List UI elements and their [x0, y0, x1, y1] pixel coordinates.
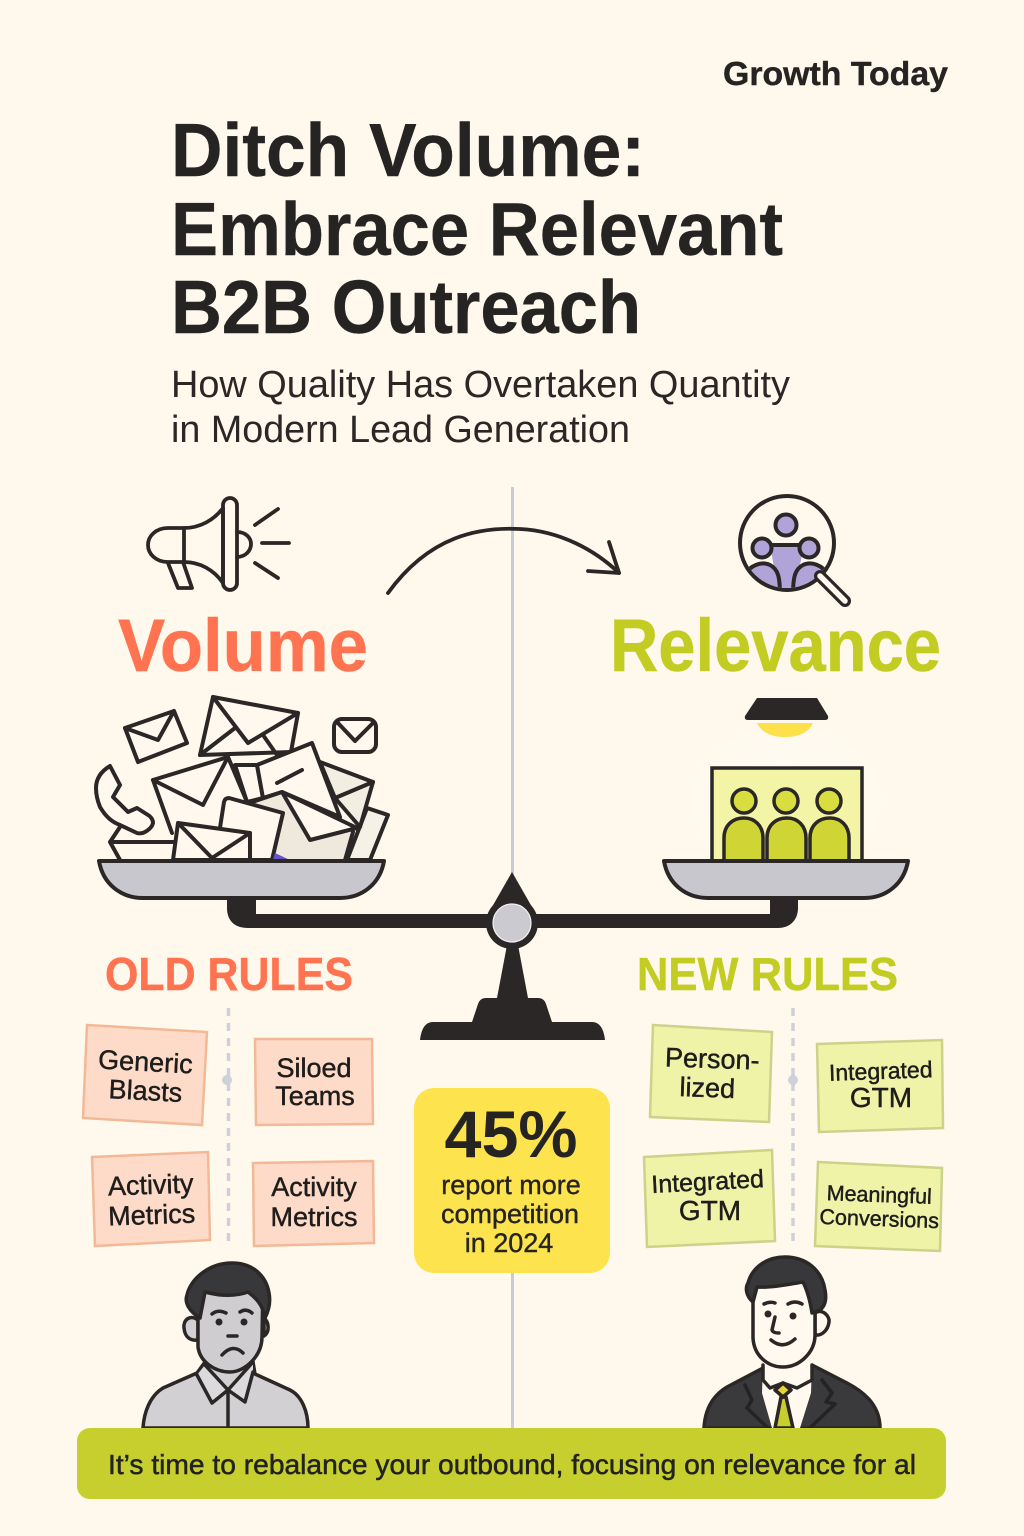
note: Personalized	[650, 1025, 772, 1122]
note: Integrated GTM bottom: GTM	[679, 1195, 741, 1226]
note: Meaningful Conversions	[815, 1162, 942, 1251]
heading: old rules: OLD RULES	[105, 948, 353, 1000]
balance scale	[99, 861, 908, 1040]
callout: 45% statistic: in 2024	[465, 1228, 553, 1258]
note: Siloed Teams: Teams	[275, 1081, 355, 1111]
note: Integrated GTM top: Integrated	[829, 1056, 933, 1086]
note: Activity Metrics left: Activity	[107, 1169, 194, 1201]
note: Generic Blasts	[83, 1025, 207, 1125]
callout: 45% statistic	[414, 1088, 610, 1273]
icon: team in spotlight frame	[712, 768, 862, 864]
heading: new rules: NEW RULES	[637, 948, 898, 1000]
subtitle: in Modern Lead Generation	[171, 409, 630, 451]
note: Siloed Teams	[255, 1039, 373, 1125]
note: Integrated GTM top: GTM	[850, 1082, 912, 1113]
arrow: volume to relevance	[388, 529, 619, 593]
note: Activity Metrics right: Activity	[271, 1172, 357, 1202]
note: Personalized: Person-	[665, 1042, 760, 1076]
icon: magnifier with people	[740, 496, 845, 601]
note: Activity Metrics right: Metrics	[270, 1202, 358, 1232]
note: Generic Blasts: Generic	[97, 1045, 193, 1079]
scale beam	[227, 897, 798, 928]
fulcrum pivot	[493, 904, 531, 942]
subtitle: How Quality Has Overtaken Quantity	[171, 364, 790, 406]
note: Personalized: lized	[679, 1072, 736, 1104]
divider: new rules	[788, 1008, 798, 1247]
note: Integrated GTM bottom	[644, 1150, 775, 1247]
brand name: Growth Today	[723, 55, 949, 92]
note: Integrated GTM top	[817, 1040, 943, 1132]
title	[171, 108, 783, 349]
person: frustrated old-rules worker	[143, 1263, 308, 1428]
callout: 45% statistic: competition	[441, 1199, 579, 1229]
note: Activity Metrics right	[253, 1161, 374, 1246]
callout: 45% statistic: report more	[441, 1170, 581, 1200]
title: Ditch Volume:	[171, 108, 645, 192]
call-to-action banner: It’s time to rebalance your outbound, focusing on relevance for al	[108, 1449, 916, 1480]
heading: Volume: Volume	[118, 604, 368, 687]
note: Meaningful Conversions: Conversions	[819, 1205, 939, 1233]
note: Siloed Teams: Siloed	[276, 1053, 352, 1083]
note: Integrated GTM bottom: Integrated	[651, 1165, 765, 1199]
callout: 45% statistic: 45%	[444, 1097, 578, 1171]
title: Embrace Relevant	[171, 187, 783, 271]
person: confident new-rules worker	[704, 1257, 880, 1428]
subtitle	[171, 364, 790, 451]
note: Meaningful Conversions: Meaningful	[826, 1181, 932, 1209]
icon: megaphone	[148, 498, 289, 590]
center divider line	[511, 487, 514, 1430]
divider: old rules	[222, 1008, 232, 1247]
heading: Relevance: Relevance	[610, 604, 941, 687]
title: B2B Outreach	[171, 265, 641, 349]
note: Generic Blasts: Blasts	[108, 1074, 183, 1108]
note: Activity Metrics left	[92, 1152, 210, 1246]
icon: pile of envelopes and phone	[96, 697, 388, 860]
note: Activity Metrics left: Metrics	[108, 1198, 196, 1232]
left pan	[99, 861, 384, 898]
call-to-action banner	[77, 1428, 946, 1499]
fulcrum stand	[420, 872, 605, 1040]
right pan	[664, 861, 908, 898]
icon: spotlight lamp	[676, 698, 896, 885]
